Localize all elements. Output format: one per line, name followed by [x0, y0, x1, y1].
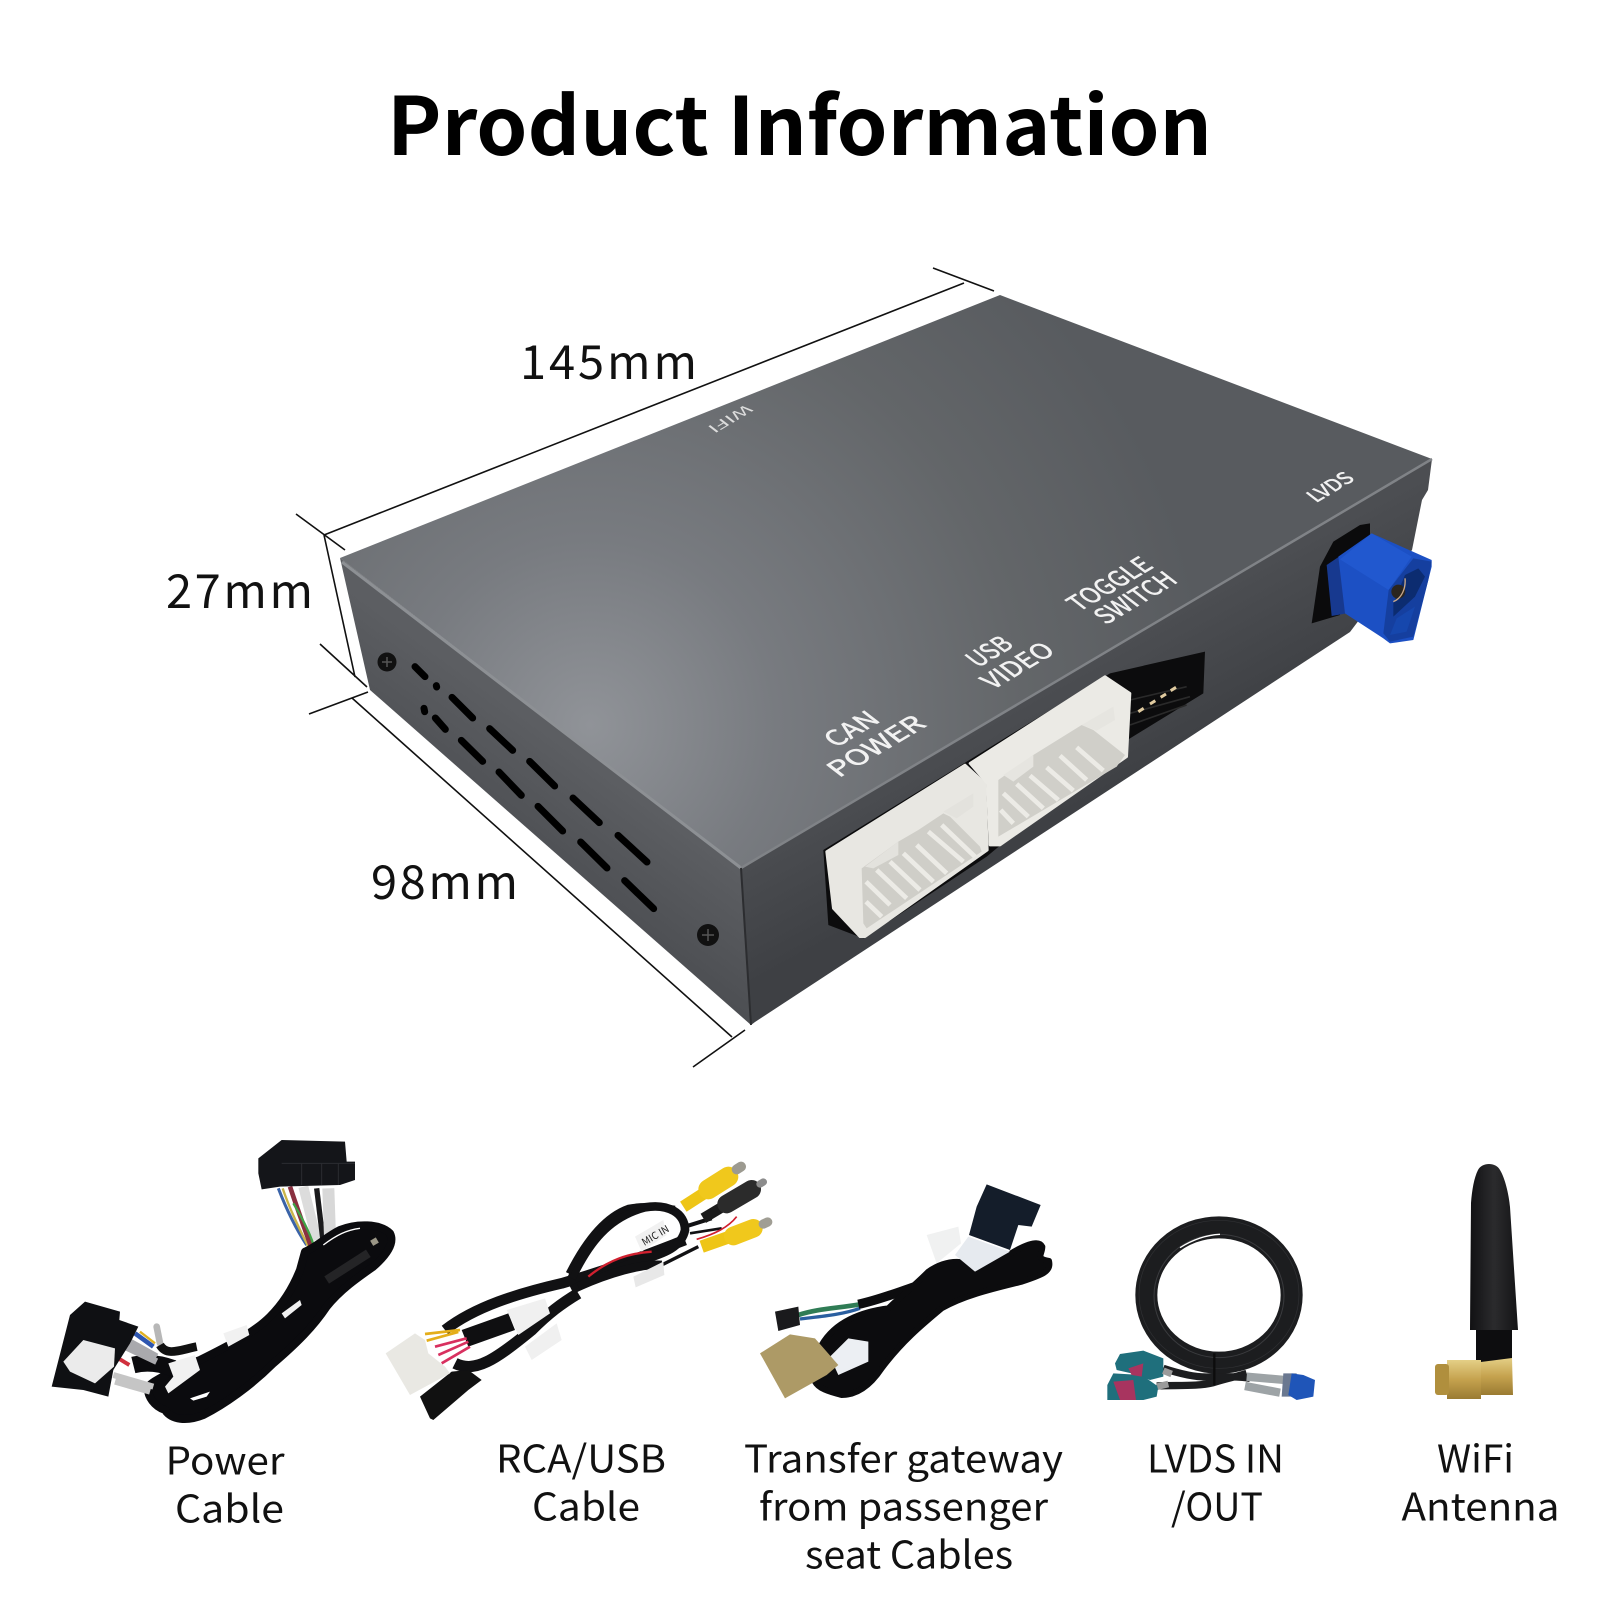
caption: WiFi antenna: WiFi [1437, 1428, 1514, 1484]
accessory: power cable [52, 1140, 391, 1419]
caption: RCA/USB cable: Cable [532, 1476, 640, 1532]
accessory: WiFi antenna [1435, 1164, 1518, 1399]
caption: power cable: Power [166, 1430, 285, 1486]
dimension label: length: 145mm [520, 324, 697, 393]
dimension lines [296, 268, 994, 1067]
printed port labels: SWITCH [1083, 564, 1185, 630]
printed port labels: POWER [816, 708, 934, 783]
caption: RCA/USB cable: RCA/USB [496, 1428, 666, 1484]
accessory: LVDS cable [1107, 1220, 1315, 1400]
caption: power cable: Cable [175, 1478, 284, 1534]
caption: transfer gateway: seat Cables [805, 1524, 1013, 1580]
caption: LVDS: LVDS IN [1147, 1428, 1284, 1484]
printed port labels: VIDEO [970, 635, 1063, 695]
caption: LVDS: /OUT [1171, 1476, 1263, 1532]
caption: WiFi antenna: Antenna [1402, 1476, 1560, 1532]
printed port labels: TOGGLE [1056, 549, 1161, 617]
harness sleeve [148, 1225, 391, 1419]
RCA plugs [683, 1167, 768, 1247]
printed port labels: USB [955, 628, 1021, 673]
printed port labels: WIFI [702, 401, 758, 437]
tag: MIC IN: MIC IN [638, 1220, 671, 1249]
title: Product Information [387, 63, 1212, 179]
product box [340, 295, 1432, 1025]
box left face with vents [340, 558, 751, 1025]
white connector: USB VIDEO [970, 677, 1130, 845]
connector wires [425, 1330, 460, 1341]
accessory: RCA/USB cable [386, 1167, 768, 1420]
accessory: transfer gateway cable [760, 1184, 1049, 1398]
box right face [741, 459, 1432, 1025]
printed port labels [702, 401, 1360, 783]
box top face [340, 295, 1432, 868]
caption: transfer gateway: from passenger [759, 1476, 1048, 1532]
dimension label: height: 27mm [166, 553, 313, 622]
harness wires [278, 1187, 330, 1250]
connector recess and toggle switch [823, 652, 1205, 938]
white connector: CAN POWER [827, 765, 987, 937]
black cable strands [445, 1206, 722, 1367]
printed port labels: LVDS [1298, 465, 1360, 507]
LVDS blue connector [1312, 523, 1432, 643]
caption: transfer gateway: Transfer gateway [744, 1428, 1063, 1484]
dimension label: width: 98mm [371, 844, 518, 913]
printed port labels: CAN [813, 703, 888, 753]
left connector and wires [122, 1338, 157, 1362]
